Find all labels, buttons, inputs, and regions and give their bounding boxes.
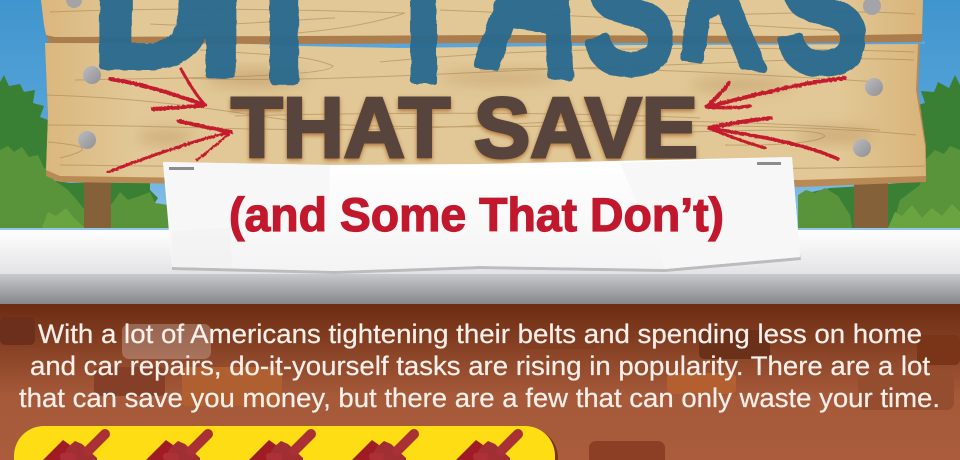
intro text: and car repairs, do-it-yourself tasks are rising in popularity. There are a lot <box>30 351 931 381</box>
left bushes <box>0 75 170 228</box>
yellow panel <box>14 426 558 460</box>
tape marks <box>169 167 194 170</box>
icon: paint brush 1 <box>43 434 105 460</box>
nails <box>66 0 883 157</box>
icon: paint brush 3 <box>249 434 311 460</box>
sky <box>0 0 960 232</box>
intro text <box>19 319 940 413</box>
intro text: that can save you money, but there are a few that can only waste your time. <box>19 383 940 413</box>
upper plank <box>42 0 923 44</box>
paper note <box>163 157 801 274</box>
icon: paint brush 2 <box>146 434 208 460</box>
white ledge <box>0 230 960 304</box>
sign posts <box>84 180 888 228</box>
heading: THAT SAVE: THAT SAVE <box>231 81 698 176</box>
arrow: upper right <box>707 78 845 108</box>
wood grain <box>46 9 925 169</box>
lower plank <box>45 44 926 187</box>
wood stains <box>137 69 875 144</box>
arrow: upper left <box>110 69 205 109</box>
icon: paint brush row <box>43 434 518 460</box>
bricks <box>0 317 35 345</box>
painted title: DIY TASKS <box>92 0 868 139</box>
sky gap between planks <box>230 41 925 48</box>
right bushes <box>798 75 960 228</box>
arrow: lower right <box>709 118 838 159</box>
brick wall <box>0 304 960 460</box>
intro text: With a lot of Americans tightening their belts and spending less on home <box>38 319 922 349</box>
icon: paint brush 4 <box>352 434 414 460</box>
subheading: (and Some That Don’t) <box>229 188 724 241</box>
arrow: lower left <box>108 121 231 172</box>
red arrows <box>108 69 845 172</box>
wooden sign <box>41 0 926 187</box>
icon: paint brush 5 <box>456 434 518 460</box>
